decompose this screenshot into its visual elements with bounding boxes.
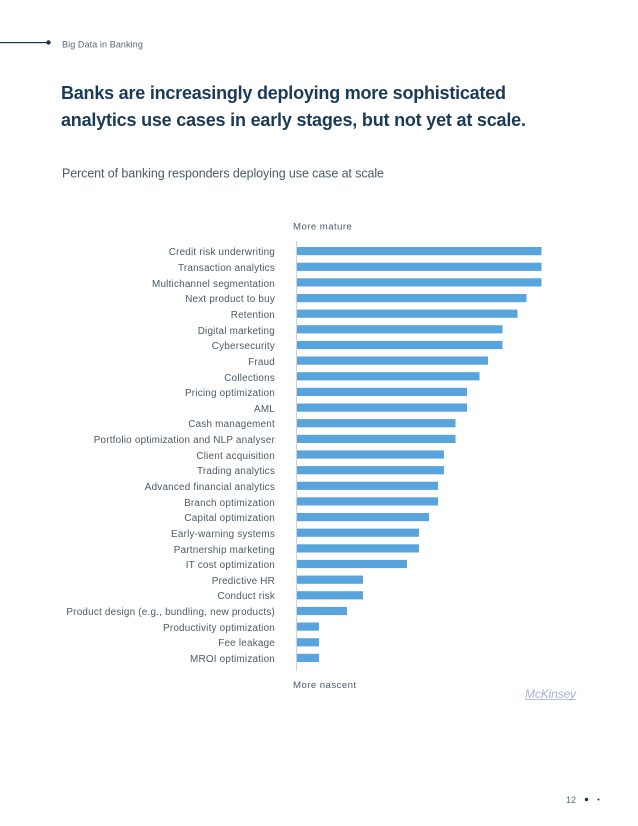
page number: 12 [566,795,576,805]
axis label: more nascent: More nascent [293,680,357,691]
bar labels: AML [254,404,275,415]
source logo: McKinsey: McKinsey [525,687,577,701]
title: analytics use cases in early stages, but not yet at scale. [61,110,526,130]
bar labels: Fee leakage [218,638,275,649]
bar labels: Productivity optimization [163,623,275,634]
bars [297,247,542,662]
bar labels: Portfolio optimization and NLP analyser [94,435,275,446]
bar labels: Capital optimization [184,513,275,524]
bar labels: Retention [231,310,275,321]
bar labels: Advanced financial analytics [145,482,275,493]
subtitle: Percent of banking responders deploying use case at scale [62,166,384,180]
bar labels: Digital marketing [198,326,275,337]
bar labels: Branch optimization [184,498,275,509]
bar labels: Trading analytics [197,466,275,477]
bar labels: Predictive HR [212,576,275,587]
bar labels: MROI optimization [190,654,275,665]
title: Banks are increasingly deploying more sophisticated [61,83,506,103]
title [61,83,526,130]
bar labels: Conduct risk [217,591,275,602]
bar labels: Early-warning systems [171,529,275,540]
bar labels: Fraud [248,357,275,368]
bar labels: Collections [224,373,275,384]
bar labels: Next product to buy [185,294,275,305]
bar labels: IT cost optimization [186,560,275,571]
bar labels: Cash management [188,419,275,430]
bar labels: Partnership marketing [174,545,275,556]
header rule with dot [0,40,51,45]
bar labels [66,247,275,665]
bar labels: Client acquisition [196,451,275,462]
page dots [585,798,600,801]
bar labels: Multichannel segmentation [152,279,275,290]
bar labels: Cybersecurity [212,341,275,352]
bar labels: Credit risk underwriting [169,247,275,258]
section label: Big Data in Banking [62,40,143,50]
bar labels: Transaction analytics [178,263,275,274]
bar labels: Pricing optimization [185,388,275,399]
axis label: more mature: More mature [293,222,352,232]
bar labels: Product design (e.g., bundling, new products) [66,607,275,618]
bar chart [66,241,542,671]
